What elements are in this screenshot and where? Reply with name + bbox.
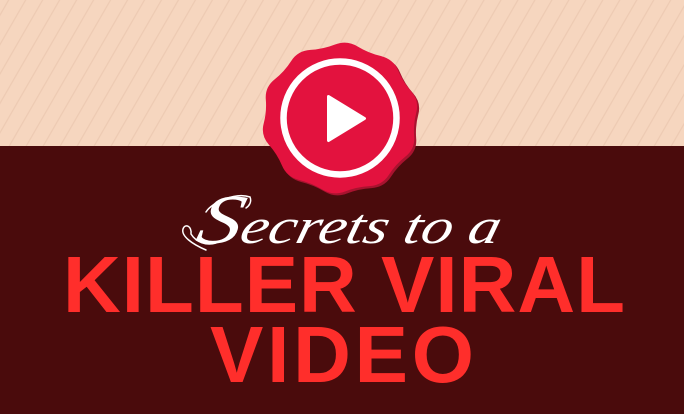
panel: peach striped background [0,0,684,146]
seal body [258,36,422,200]
script flourish [183,196,251,250]
script text: Secrets to a [190,182,512,259]
heading: killer viral: KILLER VIRAL [63,240,625,329]
icon: wax seal play button [258,36,424,202]
heading: script line [183,182,512,259]
play triangle [328,96,364,140]
heading: video: VIDEO [210,310,474,399]
white ring [284,62,396,174]
panel: dark maroon background [0,146,684,414]
seal shadow [260,38,424,202]
